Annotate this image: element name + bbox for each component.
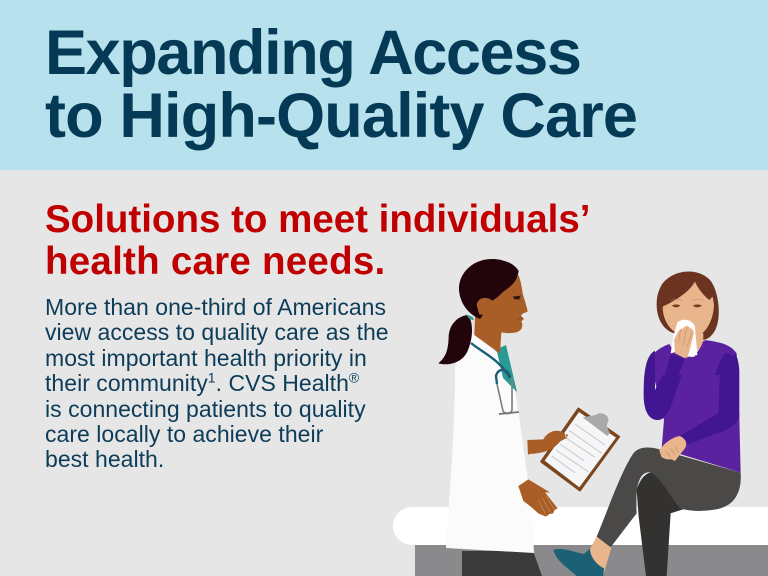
- patient sweater: [650, 340, 741, 473]
- patient sweater arms: [644, 350, 687, 420]
- body text: best health.: [45, 446, 164, 472]
- body text: view access to quality care as the: [45, 319, 389, 345]
- doctor scrubs: [495, 345, 517, 392]
- patient hand on knee: [659, 436, 686, 461]
- body text: More than one-third of Americans: [45, 294, 386, 320]
- patient tissue: [671, 320, 697, 357]
- patient neck: [678, 330, 703, 358]
- doctor ponytail: [438, 315, 472, 364]
- body text: their community1. CVS Health®: [45, 370, 359, 396]
- subheading: Solutions to meet individuals’: [45, 198, 590, 241]
- title: [45, 18, 637, 151]
- patient back leg: [637, 472, 687, 576]
- patient shoe: [553, 549, 604, 576]
- title: Expanding Access: [45, 18, 580, 88]
- title: to High-Quality Care: [45, 81, 637, 151]
- patient head: [657, 272, 738, 375]
- doctor neck and face: [474, 275, 528, 354]
- patient: [553, 272, 741, 576]
- body text: most important health priority in: [45, 345, 367, 371]
- doctor coat: [446, 333, 534, 553]
- clipboard and doctor hands: [518, 408, 619, 517]
- doctor lower hand: [518, 479, 558, 517]
- doctor trousers: [462, 551, 542, 576]
- doctor ear: [477, 299, 490, 311]
- patient face: [663, 282, 714, 338]
- subheading: health care needs.: [45, 240, 385, 283]
- doctor mouth: [517, 317, 523, 320]
- doctor hair: [459, 259, 519, 319]
- body text: [45, 294, 389, 472]
- patient ankle: [587, 537, 612, 575]
- ring highlight: [565, 433, 569, 437]
- stethoscope: [471, 343, 519, 414]
- body text: is connecting patients to quality: [45, 396, 366, 422]
- patient front leg: [597, 447, 741, 547]
- patient sweater collar: [663, 341, 735, 375]
- doctor eye: [513, 296, 521, 299]
- patient hand at face: [674, 326, 694, 358]
- patient hair: [657, 272, 719, 340]
- subheading: [45, 198, 590, 283]
- clipboard: [541, 408, 619, 491]
- body text: care locally to achieve their: [45, 421, 323, 447]
- patient sleeve near face: [665, 354, 685, 375]
- header band: [0, 0, 768, 170]
- doctor upper hand: [527, 431, 569, 455]
- doctor hair tie: [466, 314, 474, 320]
- doctor: [438, 259, 542, 576]
- exam table: [393, 507, 768, 576]
- doctor head: [438, 259, 528, 364]
- patient eyes: [672, 304, 702, 307]
